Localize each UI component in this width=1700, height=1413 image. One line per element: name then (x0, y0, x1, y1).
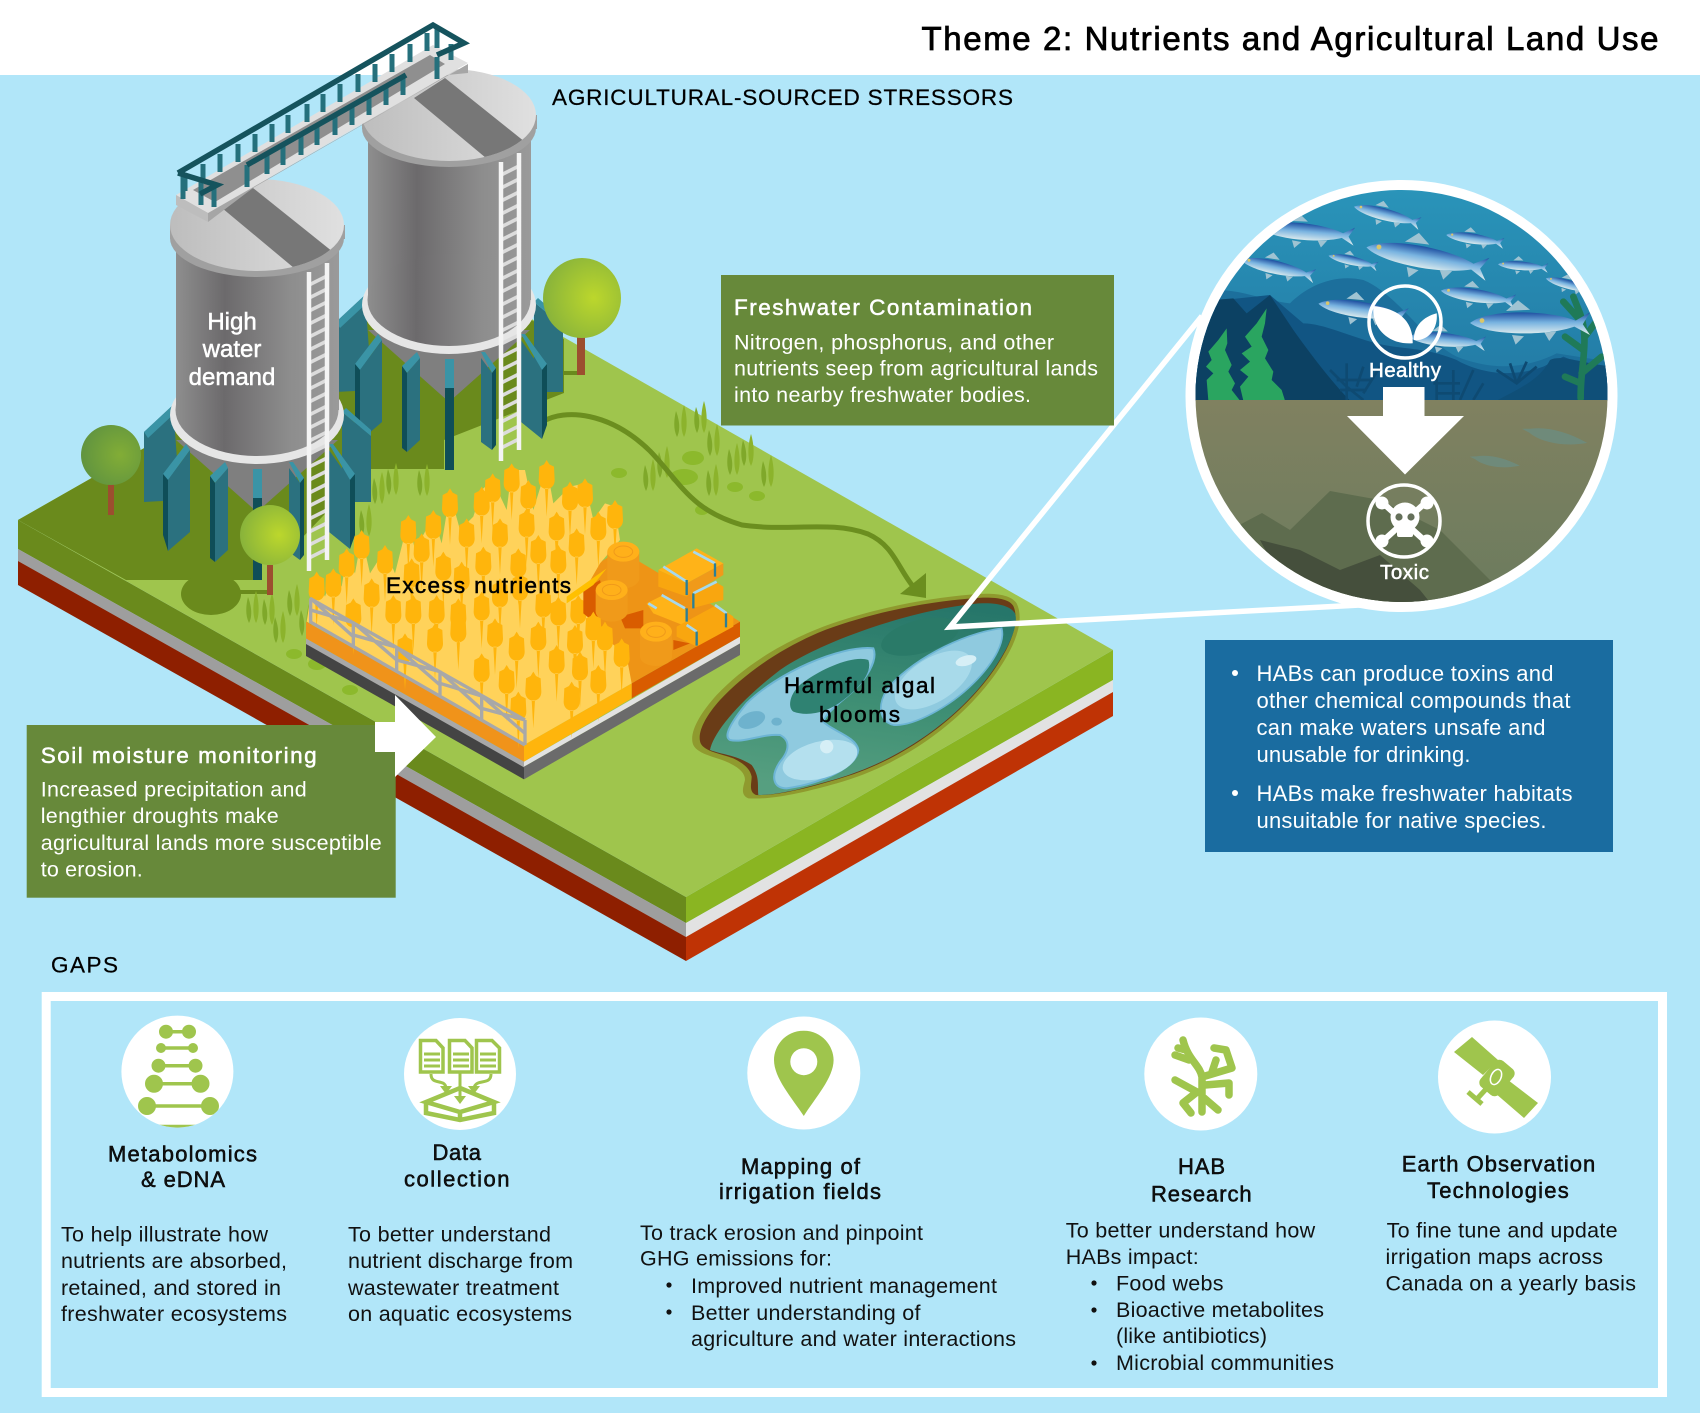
panel: freshwater contamination: nutrients seep from agricultural lands (734, 356, 1098, 380)
panel: HAB effects: can make waters unsafe and (1256, 715, 1546, 740)
panel: soil moisture monitoring: lengthier droughts make (41, 804, 279, 828)
gap: mapping irrigation fields: Mapping of (741, 1154, 861, 1179)
panel: soil moisture monitoring: agricultural lands more susceptible (41, 831, 382, 855)
fish school (1354, 201, 1422, 230)
gap: earth observation technologies: Earth Observation (1402, 1152, 1595, 1177)
gap: HAB research: To better understand how (1066, 1219, 1316, 1243)
front wheat ears (510, 612, 630, 748)
gap: HAB research: HABs impact: (1066, 1245, 1199, 1269)
magnified lens: healthy vs toxic water (1186, 180, 1620, 615)
label: high water demand (189, 308, 275, 391)
gap: earth observation technologies: irrigation maps across (1386, 1245, 1603, 1269)
label: high water demand: demand (189, 364, 275, 391)
seabed, kelp and coral (1190, 278, 1620, 401)
grass blobs (286, 451, 765, 695)
wheat field platform (306, 460, 740, 779)
arrow: healthy to toxic (1347, 387, 1464, 474)
gap: mapping irrigation fields: GHG emissions for: (640, 1247, 832, 1271)
gap: data collection: To better understand (348, 1223, 551, 1247)
gap: mapping irrigation fields: irrigation fields (719, 1179, 881, 1204)
pond: harmful algal bloom (692, 594, 1020, 799)
wheat ears (309, 460, 623, 728)
label: harmful algal blooms: blooms (819, 702, 900, 727)
gap: mapping irrigation fields: Improved nutrient management (691, 1274, 997, 1298)
hay bales (567, 542, 733, 666)
tree: front (240, 505, 300, 595)
panel: soil moisture monitoring: to erosion. (41, 858, 143, 882)
gap: HAB research: (like antibiotics) (1116, 1324, 1267, 1348)
panel: soil moisture monitoring: Soil moisture monitoring (41, 743, 317, 768)
gap: HAB research: HAB (1178, 1154, 1225, 1179)
gap: earth observation technologies (1386, 1020, 1636, 1296)
gap: data collection: nutrient discharge from (348, 1249, 573, 1273)
tree: back right (543, 258, 621, 375)
panel: HAB effects: unusable for drinking. (1256, 742, 1470, 767)
label: high water demand: water (202, 336, 261, 363)
silo: right (336, 69, 563, 470)
gap: HAB research: Microbial communities (1116, 1351, 1334, 1375)
gap: mapping irrigation fields: To track erosion and pinpoint (640, 1221, 923, 1245)
panel: HAB effects (1205, 640, 1613, 852)
label: toxic: Toxic (1380, 561, 1429, 584)
arrow: nutrient runoff stream (542, 415, 926, 598)
callout pointer lines (950, 316, 1360, 627)
gap: mapping irrigation fields: Better understanding of (691, 1301, 921, 1325)
gap: mapping irrigation fields: agriculture and water interactions (691, 1327, 1016, 1351)
panel: HAB effects: HABs make freshwater habitats (1256, 781, 1572, 806)
panel: freshwater contamination: into nearby freshwater bodies. (734, 383, 1031, 407)
label: healthy: Healthy (1369, 359, 1442, 382)
silo: left (144, 179, 371, 580)
panel: soil moisture monitoring: Increased precipitation and (41, 778, 307, 802)
gap: metabolomics and eDNA (61, 1016, 287, 1326)
gap: metabolomics and eDNA: retained, and stored in (61, 1276, 281, 1300)
panel: freshwater contamination: Nitrogen, phosphorus, and other (734, 330, 1054, 354)
panel: HAB effects: other chemical compounds that (1256, 688, 1570, 713)
header band (0, 0, 1700, 75)
gap: metabolomics and eDNA: To help illustrate how (61, 1223, 268, 1247)
gap: earth observation technologies: Canada on a yearly basis (1386, 1272, 1636, 1296)
panel: soil moisture monitoring (27, 725, 396, 898)
heading: stressors: AGRICULTURAL-SOURCED STRESSORS (552, 85, 1013, 110)
panel: gaps frame (46, 996, 1663, 1392)
gap: metabolomics and eDNA: Metabolomics (108, 1142, 257, 1167)
label: harmful algal blooms: Harmful algal (784, 673, 935, 698)
icon: algae (1144, 1018, 1257, 1130)
panel: freshwater contamination (721, 275, 1114, 426)
gap: metabolomics and eDNA: freshwater ecosystems (61, 1302, 287, 1326)
icon: healthy leaves (1369, 286, 1441, 358)
heading: gaps: GAPS (51, 953, 118, 978)
icon: toxic skull (1368, 485, 1440, 557)
gap: HAB research: Bioactive metabolites (1116, 1298, 1324, 1322)
icon: satellite (1438, 1020, 1551, 1134)
panel: HAB effects: HABs can produce toxins and (1256, 661, 1554, 686)
gap: HAB research: Food webs (1116, 1272, 1224, 1296)
gap: data collection: wastewater treatment (347, 1276, 559, 1300)
title: Theme 2: Nutrients and Agricultural Land Use (922, 20, 1658, 57)
gap: data collection: Data (432, 1140, 482, 1165)
gap: earth observation technologies: Technologies (1427, 1178, 1569, 1203)
tree: left (81, 425, 141, 515)
arrow: soil moisture to field (375, 695, 436, 777)
gap: HAB research: Research (1151, 1182, 1252, 1207)
icon: DNA (121, 1016, 233, 1128)
label: high water demand: High (207, 308, 257, 336)
grass tufts (246, 401, 774, 643)
fence (310, 598, 525, 745)
bridge catwalk (176, 25, 468, 222)
gap: metabolomics and eDNA: & eDNA (141, 1167, 225, 1192)
gap: data collection: collection (404, 1167, 510, 1192)
panel: HAB effects: unsuitable for native species. (1256, 808, 1546, 833)
gap: data collection: on aquatic ecosystems (348, 1302, 572, 1326)
icon: data files into box (404, 1018, 516, 1130)
gap: mapping irrigation fields (640, 1016, 1016, 1351)
land slab (18, 273, 1113, 961)
panel: freshwater contamination: Freshwater Contamination (734, 295, 1032, 320)
silo shadow on land (18, 273, 584, 615)
gap: earth observation technologies: To fine tune and update (1387, 1219, 1618, 1243)
gap: metabolomics and eDNA: nutrients are absorbed, (61, 1249, 287, 1273)
label: harmful algal blooms (784, 673, 935, 727)
gap: data collection (347, 1018, 573, 1326)
label: excess nutrients: Excess nutrients (386, 573, 571, 598)
icon: map pin (747, 1016, 860, 1130)
wheat canopy (307, 467, 632, 745)
gap: HAB research (1066, 1018, 1334, 1375)
